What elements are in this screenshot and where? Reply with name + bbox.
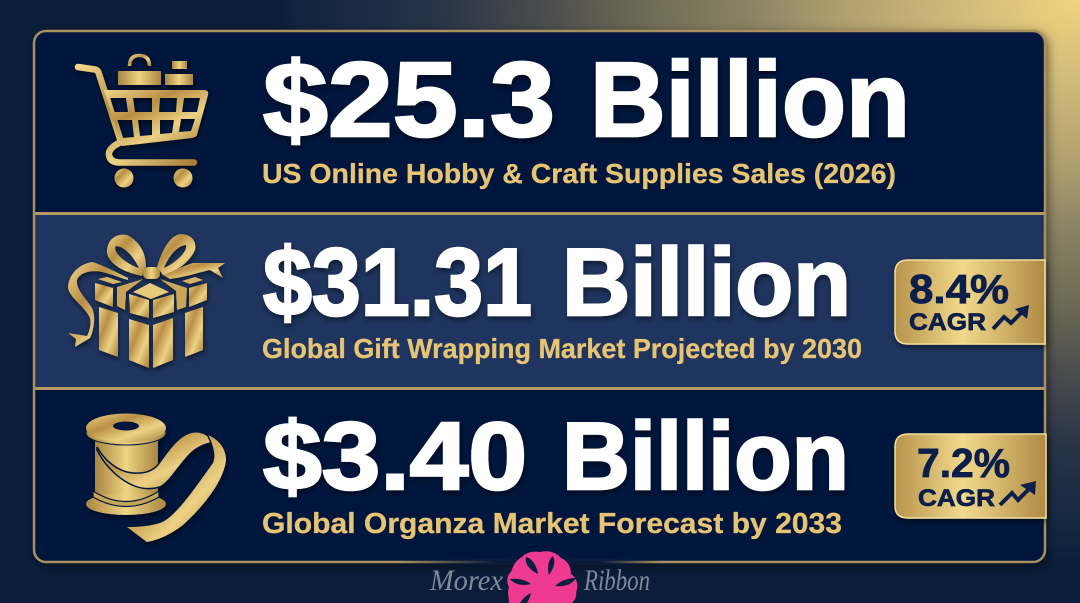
icon: gift box — [68, 234, 225, 368]
badge: 7.2% CAGR: CAGR — [918, 485, 995, 512]
stat: $25.3 Billion — [262, 41, 910, 189]
spool body — [95, 441, 158, 500]
headline: $31.31 — [263, 229, 532, 336]
box lid — [133, 283, 169, 299]
badge: 8.4% CAGR: 8.4% — [909, 266, 1009, 312]
caption: US Online Hobby & Craft Supplies Sales (2026) — [262, 158, 896, 189]
panel: gift wrapping row background — [34, 214, 1045, 389]
ribbon wrap — [97, 432, 211, 489]
top flange — [86, 421, 166, 445]
icon: shopping cart — [78, 56, 208, 188]
icon: trend arrow — [993, 305, 1029, 329]
badge: 8.4% CAGR: CAGR — [909, 309, 986, 336]
icon: trend arrow — [1000, 481, 1036, 505]
box body — [99, 307, 118, 357]
headline: $3.40 — [263, 403, 527, 510]
stat: $31.31 Billion — [262, 229, 862, 364]
icon: ribbon spool — [86, 414, 226, 542]
headline: Billion — [562, 403, 849, 510]
headline: $25.3 — [263, 41, 555, 159]
headline — [263, 229, 851, 336]
badge: 7.2% CAGR: 7.2% — [917, 440, 1010, 486]
caption: Global Organza Market Forecast by 2033 — [262, 508, 842, 540]
headline — [263, 403, 849, 510]
caption: Global Gift Wrapping Market Projected by 2030 — [262, 333, 862, 364]
bottom flange — [86, 493, 166, 515]
headline — [263, 41, 910, 159]
headline: Billion — [590, 41, 910, 159]
logo: Morex Ribbon: Morex — [429, 564, 504, 597]
stat: $3.40 Billion — [262, 403, 849, 540]
badge: 7.2% CAGR — [895, 434, 1046, 518]
ribbon bow — [107, 235, 146, 276]
icon: pink flower — [507, 551, 577, 603]
badge: 8.4% CAGR — [895, 260, 1045, 344]
headline: Billion — [562, 229, 851, 336]
logo: Morex Ribbon: Ribbon — [583, 564, 650, 597]
ribbon tail — [127, 435, 226, 542]
logo: Morex Ribbon — [429, 551, 650, 603]
